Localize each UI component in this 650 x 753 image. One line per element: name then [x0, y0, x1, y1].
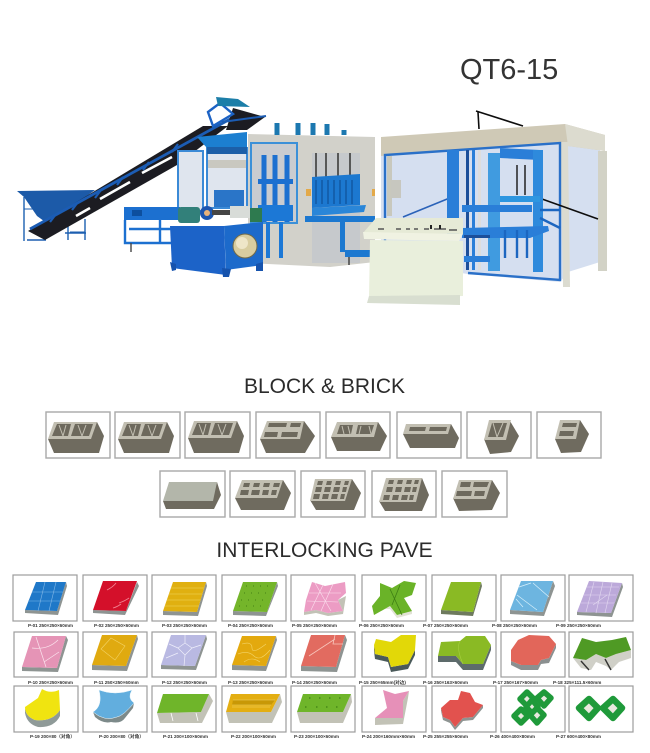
hollow brick card — [442, 471, 507, 517]
main press body — [248, 123, 375, 267]
brick card 7 — [467, 412, 531, 458]
paver P-24: P-24 200×160mm×60mm — [362, 734, 415, 739]
paver P-10 — [14, 632, 78, 685]
brick cards row 1 — [46, 412, 601, 458]
paver P-04 — [222, 575, 286, 628]
brick card 6 — [397, 412, 461, 458]
paver P-27 — [556, 686, 633, 739]
paver P-26: P-26 400×400×80mm — [490, 734, 535, 739]
brick card 2 — [115, 412, 180, 458]
receiver blue lifting frame — [447, 148, 560, 272]
paver P-23: P-23 200×100×60mm — [294, 734, 339, 739]
heading: block and brick: BLOCK & BRICK — [244, 375, 405, 398]
brick cards row 2 — [160, 471, 507, 517]
paver P-15 — [359, 632, 426, 686]
paver P-20 — [83, 686, 147, 740]
heading: interlocking pave: INTERLOCKING PAVE — [216, 539, 433, 562]
paver P-17 — [493, 632, 565, 685]
paver P-09 — [556, 575, 633, 628]
paver P-01: P-01 250×250×60mm — [28, 623, 73, 628]
brick card 3 — [185, 412, 250, 458]
paver P-02: P-02 250×250×60mm — [94, 623, 139, 628]
hopper with legs — [17, 190, 95, 241]
mixer frames — [178, 132, 247, 211]
brick card 4 — [256, 412, 320, 458]
paver P-15: P-15 250×65mm(对边) — [359, 679, 406, 686]
paver P-04: P-04 250×250×60mm — [228, 623, 273, 628]
title: model name: QT6-15 — [460, 54, 558, 86]
paver P-02 — [83, 575, 147, 628]
paver P-18: P-18 325×111.5×60mm — [553, 680, 601, 685]
paver P-08: P-08 250×250×60mm — [492, 623, 537, 628]
paver P-25: P-25 255×255×60mm — [423, 734, 468, 739]
conveyor head and motor — [208, 97, 266, 130]
paver P-14: P-14 250×250×60mm — [292, 680, 337, 685]
paver P-01 — [13, 575, 77, 628]
paver P-05: P-05 250×250×60mm — [292, 623, 337, 628]
paver P-22: P-22 200×100×60mm — [231, 734, 276, 739]
brick card 5 — [326, 412, 390, 458]
paver P-05 — [291, 575, 355, 628]
paver P-08 — [492, 575, 565, 628]
paver P-10: P-10 250×250×60mm — [28, 680, 73, 685]
paver P-22 — [222, 686, 286, 739]
paver P-25 — [423, 686, 496, 739]
brick card 8 — [537, 412, 601, 458]
paver P-16 — [423, 632, 496, 685]
paver P-03: P-03 250×250×60mm — [162, 623, 207, 628]
paver P-24 — [362, 686, 426, 739]
perforated brick card 3 — [372, 471, 436, 517]
brick card 1 — [46, 412, 110, 458]
paver P-20: P-20 200×80（对角） — [99, 733, 144, 740]
paver P-19 — [14, 686, 78, 740]
paver P-27: P-27 600×400×80mm — [556, 734, 601, 739]
paver row 1 — [13, 575, 633, 628]
paver P-16: P-16 250×163×60mm — [423, 680, 468, 685]
perforated brick card 2 — [301, 471, 365, 517]
paver P-03 — [152, 575, 216, 628]
control console — [363, 218, 463, 305]
paver P-17: P-17 250×167×60mm — [493, 680, 538, 685]
machine illustration — [17, 97, 607, 305]
paver P-07: P-07 250×250×60mm — [423, 623, 468, 628]
paver P-11: P-11 250×250×60mm — [94, 680, 139, 685]
perforated brick card 1 — [230, 471, 295, 517]
paver P-12: P-12 250×250×60mm — [162, 680, 207, 685]
motor and pump — [178, 206, 262, 223]
conveyor belt — [28, 112, 243, 240]
paver P-18 — [553, 632, 633, 685]
paver P-09: P-09 250×250×60mm — [556, 623, 601, 628]
paver P-23 — [291, 686, 355, 739]
paver P-13 — [222, 632, 286, 685]
paver P-06: P-06 250×250×60mm — [359, 623, 404, 628]
paver row 3 — [14, 686, 633, 740]
paver P-14 — [291, 632, 355, 685]
solid brick card — [160, 471, 225, 517]
block receiver enclosure — [381, 111, 607, 287]
paver P-06 — [359, 575, 426, 628]
paver P-21: P-21 200×100×60mm — [163, 734, 208, 739]
paver P-19: P-19 200×80（对角） — [30, 733, 75, 740]
paver P-11 — [83, 632, 147, 685]
paver P-13: P-13 250×250×60mm — [228, 680, 273, 685]
paver P-21 — [152, 686, 216, 739]
paver P-26 — [490, 686, 565, 739]
paver row 2 — [14, 632, 633, 686]
blue feeder table — [124, 207, 180, 252]
hydraulic tank with gauge — [170, 222, 263, 277]
paver P-12 — [152, 632, 216, 685]
paver P-07 — [423, 575, 496, 628]
